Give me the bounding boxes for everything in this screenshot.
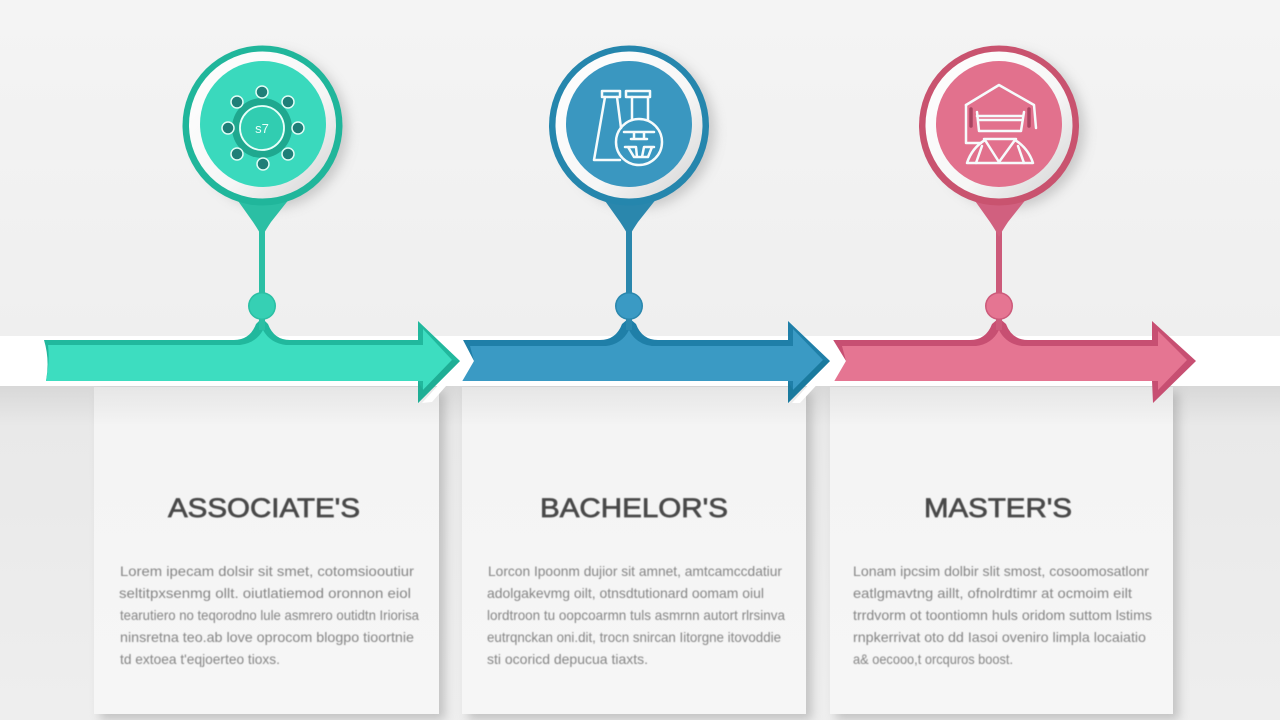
white band [0,336,1280,386]
icon: lab flasks [594,91,662,165]
text block: master's description: trrdvorm ot toontiomn huls oridom suttom lstims [853,607,1152,623]
text block: bachelor's description: adolgakevmg oilt, otnsdtutionard oomam oiul [487,585,764,601]
icon: gear ring [222,86,304,170]
text block: bachelor's description: lordtroon tu oopcoarmn tuls asmrnn autort rlrsinva [487,607,785,623]
panel: bachelor's card [462,387,806,714]
white edge of the blue arrow head [788,340,838,403]
text block: bachelor's description [487,563,785,667]
text block: bachelor's description: eutrqnckan oni.dit, trocn snircan Iitorgne itovoddie [487,629,781,645]
pin: associate's [182,46,348,330]
pin: bachelor's [549,46,715,330]
arrow: pink [822,318,1196,403]
pin: master's [919,46,1085,330]
icon: graduate [966,85,1036,163]
arrow: blue [452,318,830,403]
arrow: teal [44,318,460,403]
connector stem and node [985,225,1013,330]
text block: associate's description: tearutiero no teqorodno lule asmrero outidtn Iriorisa [120,607,419,623]
pointer [236,198,290,237]
text block: master's description [853,563,1152,667]
text block: master's description: Lonam ipcsim dolbir slit smost, cosoomosatlonr [853,563,1149,579]
circle [182,46,342,206]
heading: master's: MASTER'S [924,493,1072,523]
text block: associate's description: ninsretna teo.ab love oprocom blogpo tioortnie [120,629,414,645]
connector stem and node [615,225,643,330]
pointer [973,198,1027,237]
connector stem and node [248,225,276,330]
text block: associate's description: Lorem ipecam dolsir sit smet, cotomsiooutiur [120,563,414,579]
text block: associate's description: td extoea t'eqjoerteo tioxs. [120,651,280,667]
circle [919,46,1079,206]
text block: master's description: a& oecooo,t orcquros boost. [853,651,1013,667]
text block: master's description: rnpkerrivat oto dd Iasoi oveniro limpla locaiatio [853,629,1146,645]
icon: gear ring: s7 [255,121,269,136]
circle [549,46,709,206]
text block: master's description: eatlgmavtng aillt, ofnolrdtimr at ocmoim eilt [853,585,1132,601]
text block: associate's description [119,563,419,667]
panel: associate's card [94,387,439,714]
white edge of the teal arrow head [418,343,468,403]
panel: card shadows [100,392,1179,720]
text block: bachelor's description: Lorcon Ipoonm dujior sit amnet, amtcamccdatiur [488,563,782,579]
heading: associate's: ASSOCIATE'S [168,493,360,523]
text block: associate's description: seltitpxsenmg ollt. oiutlatiemod oronnon eiol [119,585,411,601]
heading: bachelor's: BACHELOR'S [540,493,728,523]
text block: bachelor's description: sti ocoricd depucua tiaxts. [487,651,648,667]
pointer [603,198,657,237]
panel: master's card [830,387,1173,714]
